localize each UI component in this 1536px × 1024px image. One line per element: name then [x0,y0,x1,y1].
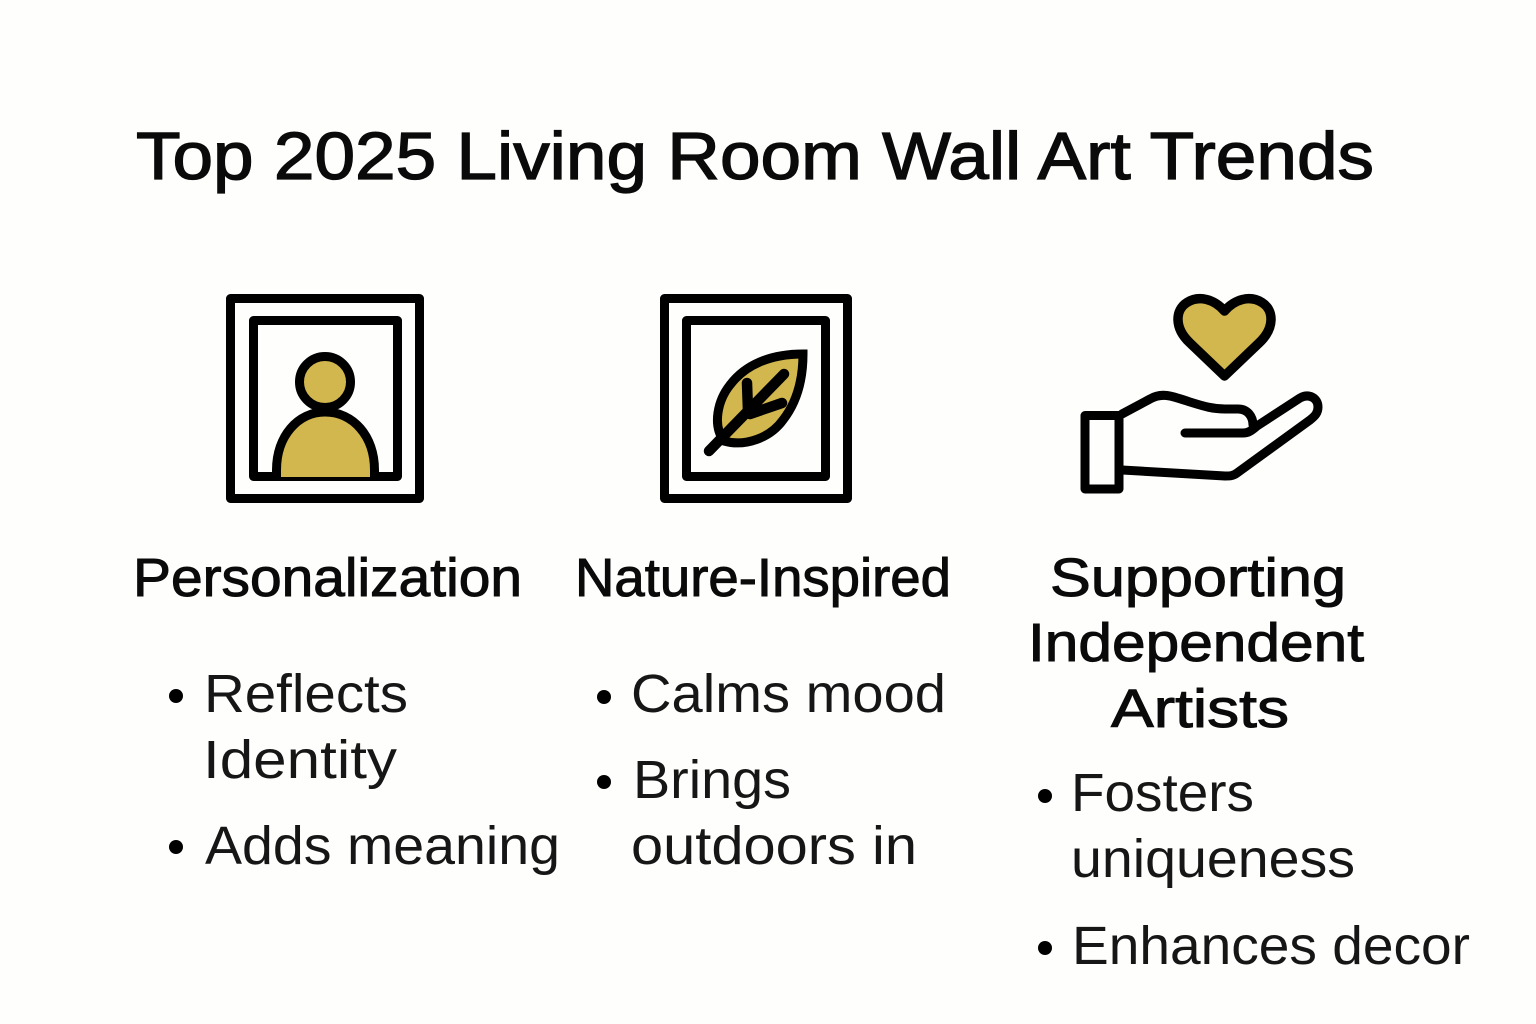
icon: framed leaf [664,298,848,498]
bullet list: personalization: Reflects [204,664,408,724]
bullet list: nature-inspired: outdoors in [631,816,917,876]
bullet list: nature-inspired: Calms mood [631,664,946,724]
title: Top 2025 Living Room Wall Art Trends [136,119,1374,194]
icon: hand holding heart [1085,299,1318,489]
heading: supporting independent artists: Artists [1111,679,1289,739]
heading: supporting independent artists: Supporting [1050,548,1346,608]
bullet list: nature-inspired: Brings [633,750,791,810]
icon: framed portrait [230,298,420,498]
bullet list: supporting independent artists: uniqueness [1071,829,1355,889]
heading: supporting independent artists: Independent [1028,613,1364,673]
bullet list: supporting independent artists: Fosters [1071,763,1254,823]
bullet list: personalization: Identity [203,730,397,790]
panel: supporting independent artists [1028,299,1470,976]
bullet list: supporting independent artists [1038,763,1470,976]
bullet list: personalization: Adds meaning [205,816,560,876]
bullet list: personalization [169,664,560,876]
panel: personalization [133,298,560,876]
panel: nature-inspired [575,298,951,876]
heading: nature-inspired: Nature-Inspired [575,548,951,608]
heading: personalization: Personalization [133,548,522,608]
heading: supporting independent artists [1028,548,1364,739]
bullet list: supporting independent artists: Enhances decor [1072,916,1470,976]
bullet list: nature-inspired [597,664,946,876]
